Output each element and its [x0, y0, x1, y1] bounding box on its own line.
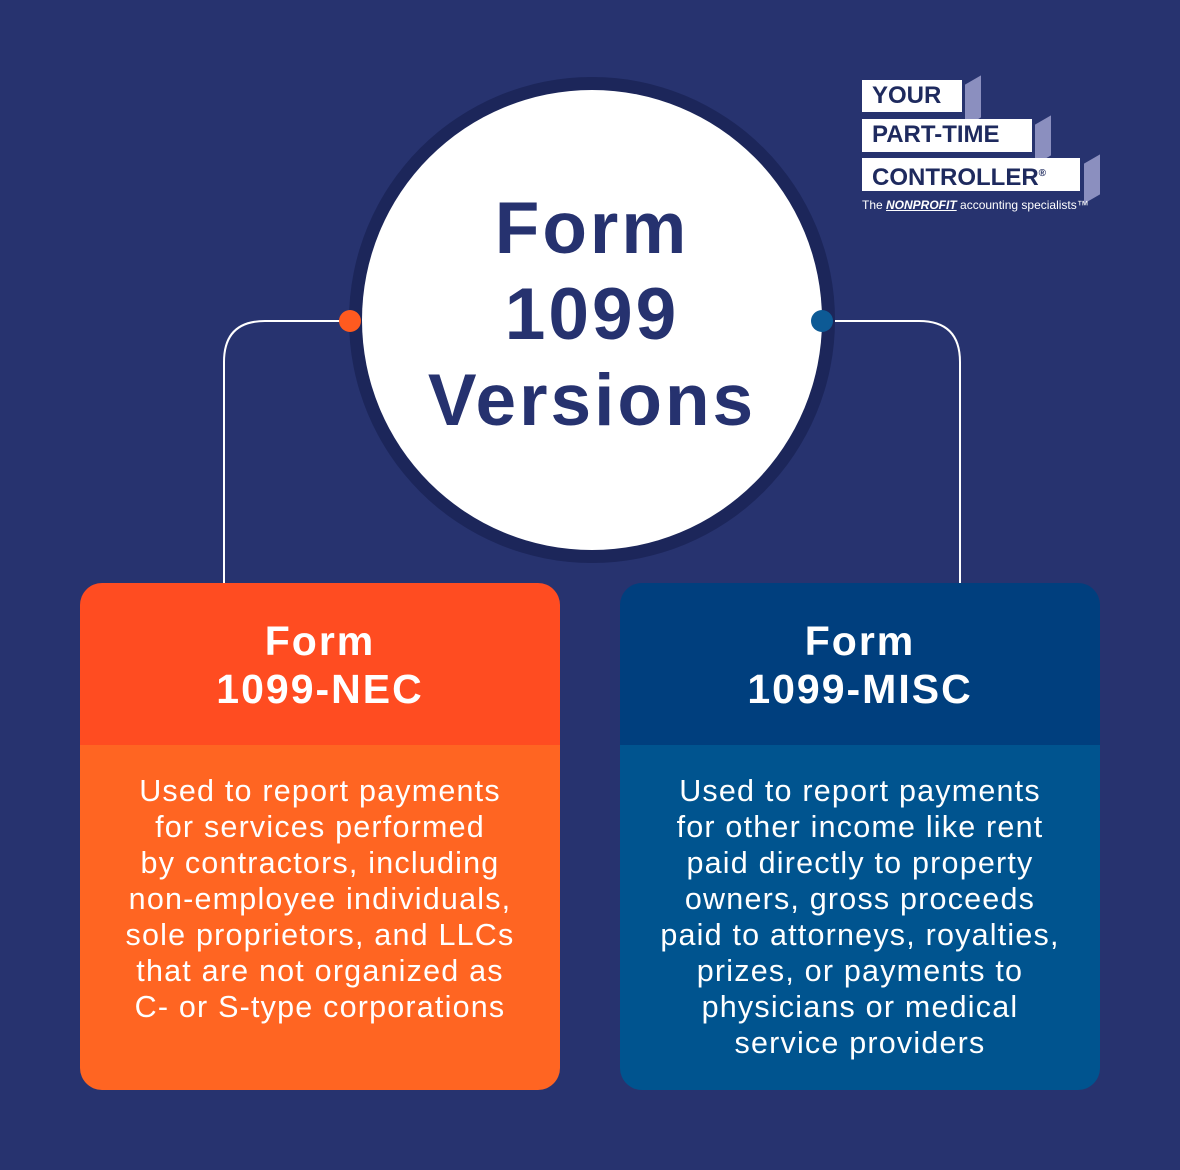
text NEC: by contractors, including [141, 846, 499, 880]
logo: The NONPROFIT accounting specialists™ [862, 198, 1089, 212]
text MISC: service providers [735, 1026, 985, 1060]
logo: CONTROLLER® [872, 164, 1046, 191]
text NEC: Used to report payments [139, 774, 501, 808]
heading NEC: 1099-NEC [216, 666, 424, 712]
heading MISC: Form [805, 618, 915, 664]
title circle [349, 77, 835, 563]
title circle: Versions [428, 360, 756, 441]
text MISC: prizes, or payments to [697, 954, 1023, 988]
text NEC: C- or S-type corporations [135, 990, 505, 1024]
dot: orange [339, 310, 361, 332]
text MISC: for other income like rent [677, 810, 1043, 844]
text NEC: that are not organized as [136, 954, 504, 988]
text NEC: non-employee individuals, [129, 882, 511, 916]
text MISC: owners, gross proceeds [685, 882, 1035, 916]
text NEC: for services performed [155, 810, 485, 844]
logo: PART-TIME [872, 121, 1000, 148]
logo [862, 76, 1100, 212]
text MISC [620, 745, 1100, 1090]
heading NEC: Form [265, 618, 375, 664]
text MISC: paid to attorneys, royalties, [660, 918, 1060, 952]
text MISC: paid directly to property [686, 846, 1034, 880]
title circle: 1099 [505, 274, 679, 355]
title circle: Form [495, 188, 689, 269]
text MISC: Used to report payments [679, 774, 1041, 808]
heading NEC [80, 583, 560, 745]
text NEC: sole proprietors, and LLCs [126, 918, 514, 952]
text MISC: physicians or medical [702, 990, 1018, 1024]
logo: YOUR [872, 82, 941, 109]
dot: blue [811, 310, 833, 332]
heading MISC [620, 583, 1100, 745]
heading MISC: 1099-MISC [747, 666, 973, 712]
panel: 1099-NEC [80, 583, 560, 1090]
text NEC [80, 745, 560, 1090]
panel: 1099-MISC [620, 583, 1100, 1090]
